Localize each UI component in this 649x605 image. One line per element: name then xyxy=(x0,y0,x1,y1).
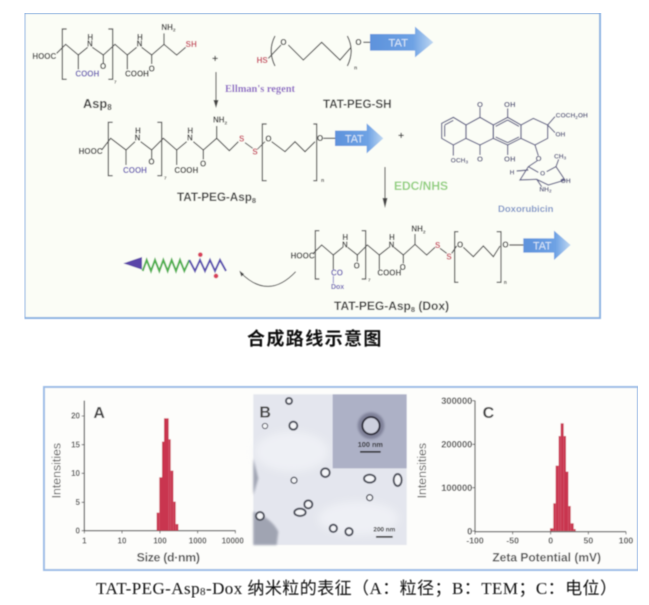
structure: Asp8: N xyxy=(137,40,143,49)
structure: TAT-PEG-Asp8: O xyxy=(265,135,272,144)
structure: Asp8: COOH xyxy=(125,70,149,79)
chart C: zeta potential: Intensities xyxy=(415,443,429,498)
TAT arrow 2 xyxy=(335,123,383,153)
structure: TAT-PEG-Asp8: H xyxy=(135,126,141,135)
chart A: size distribution: 10000 xyxy=(222,536,244,545)
arrow: Ellman's regent step xyxy=(214,72,218,108)
structure: Asp8: N xyxy=(87,40,93,49)
structure: Asp8: 2 xyxy=(173,28,176,34)
structure: Doxorubicin xyxy=(442,100,588,194)
structure: PEG-SH: O xyxy=(280,38,287,47)
structure: TAT-PEG-Asp8 (Dox): CO xyxy=(331,268,343,277)
label: Doxorubicin: Doxorubicin xyxy=(498,204,554,215)
structure: Doxorubicin: COCH xyxy=(556,113,575,120)
image B: TEM micrograph xyxy=(253,394,407,545)
image B: TEM micrograph: 100 nm xyxy=(358,440,383,449)
chart A: size distribution: 100 xyxy=(153,536,167,545)
structure: Asp8: NH xyxy=(161,23,173,32)
structure: TAT-PEG-Asp8: HOOC xyxy=(79,147,103,156)
chart C: zeta potential: 50 xyxy=(584,536,593,546)
panel: synthesis route xyxy=(24,13,600,318)
structure: Doxorubicin: 2 xyxy=(575,115,578,120)
TAT arrow 2: TAT xyxy=(345,133,364,145)
structure: Doxorubicin: OH xyxy=(561,178,571,185)
panel: characterization xyxy=(44,387,638,570)
chart A: size distribution: 5 xyxy=(76,498,81,507)
TAT arrow 3: TAT xyxy=(533,240,552,252)
structure: Doxorubicin: OH xyxy=(504,155,516,164)
chart C: zeta potential xyxy=(415,396,633,565)
structure: Asp8 xyxy=(32,23,197,84)
chart C: zeta potential: 100 xyxy=(619,536,633,546)
label: TAT-PEG-Asp8 (Dox): TAT-PEG-Asp xyxy=(334,299,411,313)
chart A: size distribution: 10 xyxy=(71,469,81,478)
label: TAT-PEG-Asp8: 8 xyxy=(252,196,256,205)
structure: Doxorubicin: OH xyxy=(555,132,566,139)
chart A: size distribution: A xyxy=(93,405,105,422)
structure: TAT-PEG-Asp8: 2 xyxy=(225,120,228,126)
curved arrow xyxy=(239,271,296,286)
structure: Doxorubicin: OH xyxy=(578,113,588,120)
structure: TAT-PEG-Asp8: 7 xyxy=(164,175,167,180)
structure: TAT-PEG-Asp8: O xyxy=(317,134,323,143)
image B: TEM micrograph: 200 nm xyxy=(373,526,396,533)
structure: Doxorubicin: 3 xyxy=(465,160,468,165)
structure: TAT-PEG-Asp8 (Dox): S xyxy=(435,241,441,250)
structure: TAT-PEG-Asp8 (Dox): N xyxy=(342,240,348,249)
chart C: zeta potential: 300000 xyxy=(441,396,472,406)
structure: TAT-PEG-Asp8 (Dox): H xyxy=(389,233,395,242)
label: TAT-PEG-Asp8 (Dox): 8 xyxy=(411,305,415,314)
label: TAT-PEG-SH: TAT-PEG-SH xyxy=(323,98,392,111)
structure: TAT-PEG-Asp8 (Dox): O xyxy=(457,241,463,250)
label: EDC/NHS: EDC/NHS xyxy=(394,179,448,193)
chart A: size distribution xyxy=(49,401,244,565)
arrow: EDC/NHS step xyxy=(382,167,388,208)
caption: characterization: -Dox 纳米粒的表征（A：粒径；B：TEM；C：电位） xyxy=(206,579,617,598)
structure: TAT-PEG-Asp8 (Dox): 2 xyxy=(423,229,426,235)
structure: TAT-PEG-Asp8: S xyxy=(252,147,258,156)
structure: TAT-PEG-Asp8 (Dox): NH xyxy=(411,225,423,234)
structure: TAT-PEG-Asp8: S xyxy=(239,135,245,144)
structure: Doxorubicin: 3 xyxy=(564,156,567,161)
chart A: size distribution: Intensities xyxy=(49,443,63,498)
structure: Asp8: O xyxy=(149,64,155,73)
histogram bars A xyxy=(157,418,178,531)
structure: PEG-SH xyxy=(257,36,370,71)
structure: TAT-PEG-Asp8 (Dox): H xyxy=(342,233,348,242)
structure: PEG-SH: HS xyxy=(257,56,268,65)
structure: Asp8: O xyxy=(100,62,106,71)
structure: TAT-PEG-Asp8 xyxy=(79,116,342,184)
structure: Doxorubicin: 2 xyxy=(549,189,552,194)
structure: TAT-PEG-Asp8: H xyxy=(187,126,193,135)
structure: TAT-PEG-Asp8 (Dox): O xyxy=(502,241,509,250)
plus sign: + xyxy=(212,53,218,65)
structure: TAT-PEG-Asp8: COOH xyxy=(123,166,147,175)
TAT arrow 3 xyxy=(523,231,571,260)
structure: Asp8: H xyxy=(137,33,143,42)
structure: PEG-SH: n xyxy=(354,65,357,71)
structure: TAT-PEG-Asp8: O xyxy=(200,159,206,168)
caption: characterization: 8 xyxy=(200,586,206,598)
chart C: zeta potential: 0 xyxy=(467,526,472,536)
chart C: zeta potential: -50 xyxy=(506,536,519,546)
structure: TAT-PEG-Asp8: N xyxy=(187,134,193,143)
structure: Doxorubicin: O xyxy=(540,170,545,177)
structure: PEG-SH: O xyxy=(355,38,362,47)
chart A: size distribution: 15 xyxy=(71,440,81,449)
TAT arrow 1: TAT xyxy=(388,37,408,49)
structure: TAT-PEG-Asp8 (Dox): COOH xyxy=(377,268,402,277)
structure: TAT-PEG-Asp8 (Dox): Dox xyxy=(331,284,344,291)
chart A: size distribution: 0 xyxy=(76,526,81,535)
structure: Doxorubicin: CH xyxy=(554,153,564,160)
plus sign: + xyxy=(398,130,404,142)
structure: Asp8: SH xyxy=(186,40,197,49)
label: TAT-PEG-Asp8: TAT-PEG-Asp xyxy=(177,191,252,204)
chart A: size distribution: 1 xyxy=(82,536,87,545)
label: TAT-PEG-Asp8 (Dox): (Dox) xyxy=(415,299,449,313)
structure: TAT-PEG-Asp8 (Dox) xyxy=(291,225,523,291)
structure: TAT-PEG-Asp8 (Dox): O xyxy=(354,261,360,270)
label: Ellman's regent: Ellman's regent xyxy=(225,84,295,95)
structure: TAT-PEG-Asp8 (Dox): S xyxy=(446,252,452,261)
structure: Doxorubicin: O xyxy=(477,100,483,109)
heading: synthesis route: 合成路线示意图 xyxy=(247,325,383,351)
structure: TAT-PEG-Asp8: NH xyxy=(213,116,225,125)
structure: Doxorubicin: NH xyxy=(539,186,549,193)
structure: Doxorubicin: O xyxy=(477,155,483,164)
chart C: zeta potential: 100000 xyxy=(441,483,472,493)
chart C: zeta potential: C xyxy=(483,405,495,422)
structure: TAT-PEG-Asp8 (Dox): 7 xyxy=(368,277,371,282)
label: Asp8: 8 xyxy=(107,103,112,112)
chart A: size distribution: 20 xyxy=(71,412,81,421)
chart A: size distribution: 10 xyxy=(118,536,127,545)
structure: TAT-PEG-Asp8: COOH xyxy=(174,166,199,175)
chart C: zeta potential: 0 xyxy=(548,536,553,546)
structure: Doxorubicin: OCH xyxy=(451,157,465,164)
structure: Asp8: COOH xyxy=(75,70,100,79)
structure: Doxorubicin: H xyxy=(510,170,515,177)
chart A: size distribution: 1000 xyxy=(189,536,207,545)
structure: TAT-PEG-Asp8 (Dox): n xyxy=(504,280,507,286)
icon: nanoparticle polymer xyxy=(123,252,226,278)
TAT arrow 1 xyxy=(370,27,433,57)
chart A: size distribution: Size (d·nm) xyxy=(137,551,200,565)
structure: TAT-PEG-Asp8 (Dox): HOOC xyxy=(291,252,315,261)
structure: Doxorubicin: O xyxy=(536,154,542,163)
structure: Asp8: H xyxy=(87,33,93,42)
chart C: zeta potential: Zeta Potential (mV) xyxy=(492,551,601,565)
structure: Asp8: HOOC xyxy=(32,52,57,61)
structure: TAT-PEG-Asp8: n xyxy=(321,178,324,184)
structure: Doxorubicin: OH xyxy=(504,100,516,109)
caption: characterization: TAT-PEG-Asp xyxy=(96,579,200,598)
structure: TAT-PEG-Asp8 (Dox): N xyxy=(389,240,395,249)
chart C: zeta potential: 200000 xyxy=(441,440,472,450)
chart C: zeta potential: -100 xyxy=(466,536,484,546)
structure: Asp8: 7 xyxy=(114,79,117,84)
structure: TAT-PEG-Asp8 (Dox): O xyxy=(400,263,406,272)
structure: TAT-PEG-Asp8: O xyxy=(148,158,155,167)
image B: TEM micrograph: B xyxy=(259,405,271,422)
histogram bars C xyxy=(550,423,576,531)
structure: TAT-PEG-Asp8: N xyxy=(135,134,141,143)
label: Asp8: Asp xyxy=(83,96,107,111)
